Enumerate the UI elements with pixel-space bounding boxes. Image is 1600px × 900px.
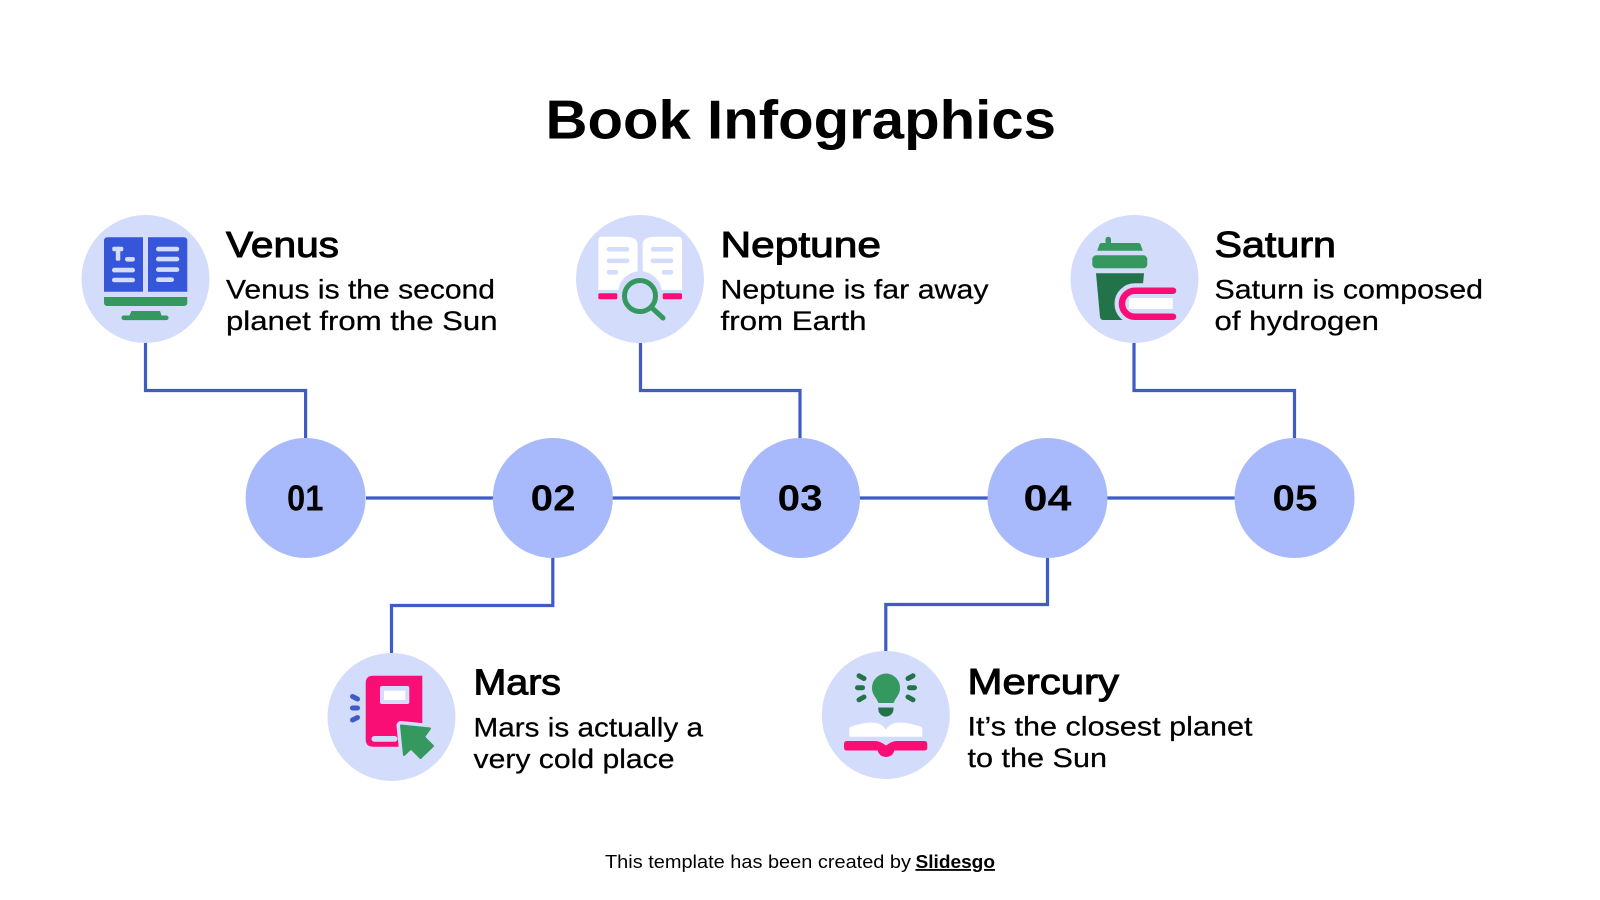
description: Venus bbox=[226, 274, 498, 336]
heading: Mercury: Mercury bbox=[968, 661, 1119, 702]
step 02 bbox=[493, 438, 613, 558]
step 04 bbox=[988, 438, 1108, 558]
description: Saturn bbox=[1214, 274, 1483, 336]
icon: book with magnifier bbox=[576, 215, 704, 343]
step 05: 05 bbox=[1272, 478, 1318, 518]
heading: Saturn: Saturn bbox=[1214, 224, 1336, 265]
panel: Mars bbox=[328, 653, 703, 781]
panel: Venus bbox=[82, 215, 498, 343]
footer credit: This template has been created by bbox=[605, 851, 912, 872]
icon: book with cursor bbox=[328, 653, 456, 781]
description: Neptune bbox=[720, 274, 989, 336]
title: Book Infographics bbox=[546, 88, 1056, 150]
panel: Neptune bbox=[576, 215, 989, 343]
step 04: 04 bbox=[1024, 478, 1072, 518]
description: Saturn: Saturn is composed bbox=[1214, 274, 1483, 304]
description: Neptune: Neptune is far away bbox=[720, 274, 989, 304]
description: Neptune: from Earth bbox=[720, 306, 866, 336]
timeline numbers bbox=[246, 438, 1355, 558]
heading: Neptune: Neptune bbox=[720, 224, 881, 265]
description: Mars bbox=[474, 712, 703, 774]
description: Venus: Venus is the second bbox=[226, 274, 495, 304]
heading: Mars: Mars bbox=[474, 662, 561, 702]
step 02: 02 bbox=[531, 478, 576, 518]
step 03: 03 bbox=[778, 478, 823, 518]
description: Saturn: of hydrogen bbox=[1214, 306, 1379, 336]
icon: light bulb over book bbox=[822, 651, 950, 779]
connector lines bbox=[146, 343, 1294, 653]
step 01 bbox=[246, 438, 366, 558]
footer credit: Slidesgo bbox=[916, 851, 995, 872]
step 05 bbox=[1234, 438, 1354, 558]
description: Mars: very cold place bbox=[474, 744, 674, 774]
panel: Mercury bbox=[822, 651, 1253, 779]
heading: Venus: Venus bbox=[226, 224, 339, 265]
step 03 bbox=[740, 438, 860, 558]
description: Venus: planet from the Sun bbox=[226, 306, 498, 336]
description: Mars: Mars is actually a bbox=[474, 712, 703, 742]
description: Mercury: It’s the closest planet bbox=[968, 712, 1253, 742]
icon: coffee cup and book bbox=[1070, 215, 1198, 343]
description: Mercury bbox=[968, 712, 1253, 773]
step 01: 01 bbox=[287, 478, 324, 518]
icon: book on monitor bbox=[82, 215, 210, 343]
panel: Saturn bbox=[1070, 215, 1483, 343]
description: Mercury: to the Sun bbox=[968, 743, 1107, 773]
